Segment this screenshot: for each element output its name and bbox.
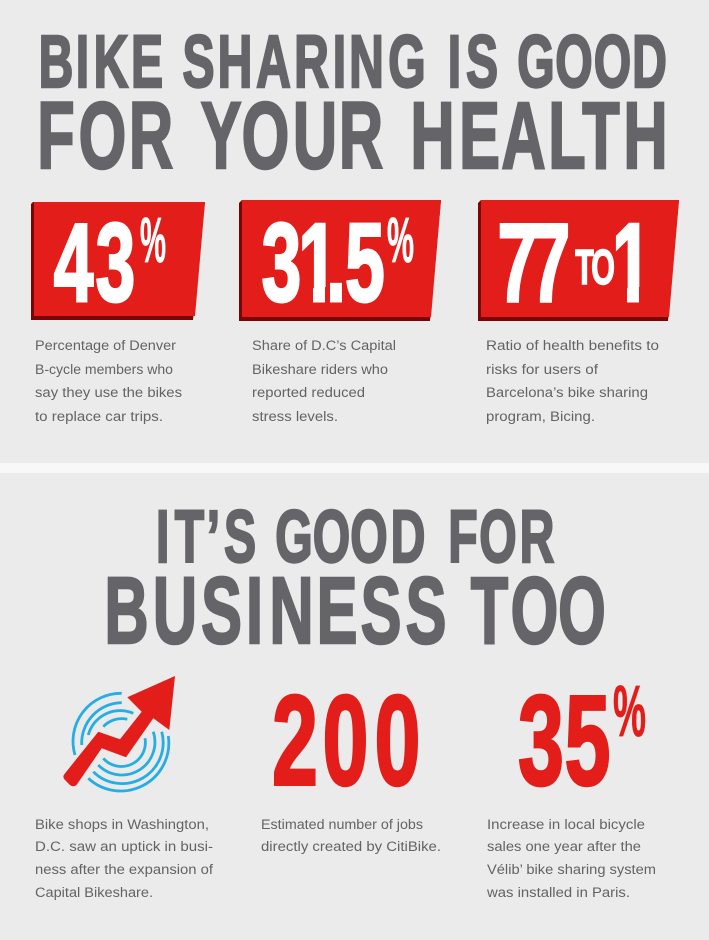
icon: rising arrow over bike share rings bbox=[63, 676, 175, 791]
stat: 35%: % bbox=[613, 672, 646, 752]
text: Capital Bikeshare stat: Share of D.C’s Capital bbox=[252, 338, 396, 353]
stat badge: 43%: 43 bbox=[54, 201, 135, 325]
text: Washington bike shops: D.C. saw an uptick in busi- bbox=[35, 839, 213, 854]
title: bike sharing is good for your health bbox=[37, 22, 668, 188]
text: Washington bike shops: ness after the expansion of bbox=[35, 862, 213, 877]
heading: it's good for business too: IT’S GOOD FOR bbox=[156, 497, 554, 579]
stat badge: 31.5% bbox=[239, 200, 441, 325]
text: Capital Bikeshare stat: stress levels. bbox=[252, 409, 338, 424]
text: Denver B-cycle stat: to replace car trips. bbox=[35, 409, 163, 424]
text: Bicing stat bbox=[486, 338, 659, 424]
text: CitiBike jobs: directly created by CitiBike. bbox=[261, 839, 441, 854]
stat badge: 43% bbox=[31, 201, 205, 325]
text: Velib sales: Increase in local bicycle bbox=[487, 817, 645, 832]
stat: 200: 200 bbox=[272, 669, 420, 812]
stat badge: 31.5%: % bbox=[387, 204, 414, 276]
stat badge: 31.5%: 31.5 bbox=[262, 201, 385, 325]
text: Capital Bikeshare stat bbox=[252, 338, 396, 424]
stat badge: 77 to 1: TO bbox=[575, 240, 615, 295]
text: Bicing stat: risks for users of bbox=[486, 362, 598, 377]
text: Denver B-cycle stat bbox=[35, 338, 182, 424]
title: bike sharing is good for your health: BIKE SHARING IS GOOD bbox=[39, 22, 667, 104]
text: Velib sales: sales one year after the bbox=[487, 839, 641, 854]
stat badge: 77 to 1: 1 bbox=[612, 201, 652, 325]
text: Capital Bikeshare stat: Bikeshare riders who bbox=[252, 362, 388, 377]
stat badge: 77 to 1: 77 bbox=[498, 201, 570, 325]
text: Bicing stat: program, Bicing. bbox=[486, 409, 595, 424]
text: Velib sales: was installed in Paris. bbox=[486, 885, 630, 900]
text: Capital Bikeshare stat: reported reduced bbox=[252, 385, 365, 400]
text: Bicing stat: Barcelona’s bike sharing bbox=[486, 385, 648, 400]
text: CitiBike jobs: Estimated number of jobs bbox=[261, 817, 423, 832]
text: Washington bike shops: Bike shops in Washington, bbox=[35, 817, 209, 832]
stat badge: 43%: % bbox=[140, 204, 166, 276]
text: Velib sales bbox=[486, 817, 656, 900]
text: Bicing stat: Ratio of health benefits to bbox=[486, 338, 659, 353]
heading: it's good for business too bbox=[104, 497, 606, 663]
text: Denver B-cycle stat: B-cycle members who bbox=[35, 362, 173, 377]
text: CitiBike jobs bbox=[261, 817, 441, 854]
heading: it's good for business too: BUSINESS TOO bbox=[104, 557, 606, 663]
text: Denver B-cycle stat: Percentage of Denver bbox=[35, 338, 177, 353]
text: Washington bike shops: Capital Bikeshare. bbox=[35, 885, 153, 900]
stat badge: 77 to 1 bbox=[478, 200, 679, 325]
text: Denver B-cycle stat: say they use the bikes bbox=[35, 385, 182, 400]
text: Washington bike shops bbox=[35, 817, 213, 900]
stat: 35%: 35 bbox=[518, 669, 610, 812]
title: bike sharing is good for your health: FOR YOUR HEALTH bbox=[37, 82, 668, 188]
text: Velib sales: Vélib’ bike sharing system bbox=[487, 862, 656, 877]
